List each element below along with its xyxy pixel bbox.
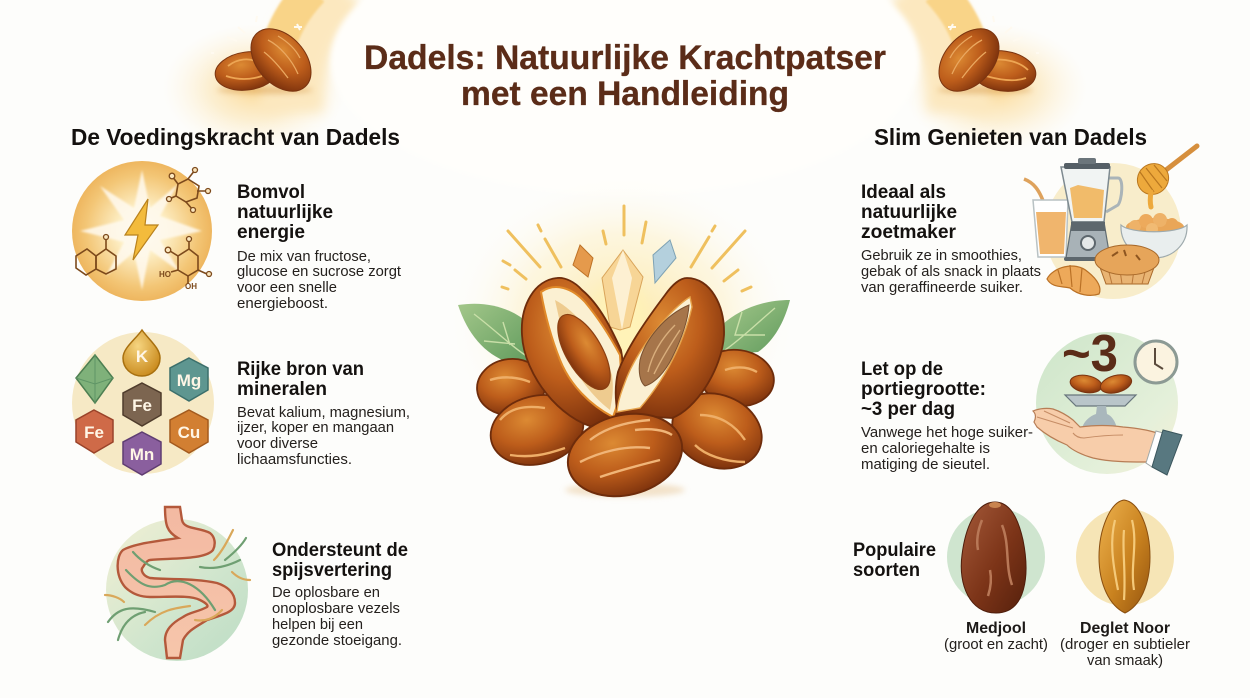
bowl with nuts	[1121, 213, 1187, 258]
variety: Deglet Noor: (droger en subtieler	[1060, 637, 1190, 653]
hand and sleeve	[1033, 408, 1182, 475]
title: met een Handleiding	[461, 75, 789, 113]
icon: mineral gems: K	[136, 347, 149, 366]
icon: energy burst with molecules: HO	[159, 270, 171, 279]
text: energy: natuurlijke	[237, 202, 333, 223]
icon: mineral gems: Mn	[130, 445, 154, 464]
rays	[502, 206, 751, 291]
title	[364, 39, 886, 113]
icon: energy burst with molecules	[72, 161, 212, 301]
text: sweetener	[861, 182, 1041, 296]
text: digestion: De oplosbare en	[272, 585, 380, 601]
text: energy: De mix van fructose,	[237, 249, 371, 265]
title: Dadels: Natuurlijke Krachtpatser	[364, 39, 886, 77]
right column: smart use	[853, 124, 1197, 669]
text: portion: ~3 per dag	[861, 399, 955, 420]
text: sweetener: van geraffineerde suiker.	[861, 280, 1023, 296]
text: energy: voor een snelle	[237, 280, 337, 296]
variety: Medjool: (groot en zacht)	[944, 637, 1048, 653]
heading: varieties	[853, 540, 936, 581]
text: digestion: Ondersteunt de	[272, 540, 408, 561]
crystals	[573, 240, 676, 380]
icon: digestive tract with fibres	[105, 507, 250, 661]
front date	[559, 402, 691, 508]
honey dipper	[1131, 146, 1197, 207]
icon: portion of three dates on a scale in a hand: ~3	[1062, 325, 1118, 383]
text: digestion	[272, 540, 408, 649]
text: portion: Vanwege het hoge suiker-	[861, 425, 1033, 441]
text: minerals: voor diverse	[237, 436, 318, 452]
text: portion: en caloriegehalte is	[861, 441, 990, 457]
top glow and golden arcs	[163, 0, 1087, 195]
text: digestion: helpen bij een	[272, 617, 363, 633]
croissant	[1047, 265, 1100, 295]
variety: Deglet Noor: van smaak)	[1087, 653, 1163, 669]
variety: Deglet Noor	[1060, 500, 1190, 669]
icon: dates top left	[211, 16, 323, 103]
icon: mineral gems	[72, 330, 214, 475]
text: portion: Let op de	[861, 359, 943, 380]
text: energy: energie	[237, 222, 305, 243]
text: energy: glucose en sucrose zorgt	[237, 264, 401, 280]
text: sweetener: Ideaal als	[861, 182, 946, 203]
pie	[1095, 245, 1159, 284]
text: sweetener: natuurlijke	[861, 202, 957, 223]
text: energy: energieboost.	[237, 296, 328, 312]
right half date with pit	[616, 278, 724, 418]
text: digestion: onoplosbare vezels	[272, 601, 400, 617]
variety: Deglet Noor: Deglet Noor	[1080, 620, 1170, 637]
scale with dates	[1065, 372, 1136, 428]
text: minerals: mineralen	[237, 379, 327, 400]
text: energy	[237, 182, 401, 312]
text: sweetener: zoetmaker	[861, 222, 957, 243]
center illustration: opened dates	[447, 175, 797, 508]
heading: varieties: soorten	[853, 560, 920, 581]
text: digestion: gezonde stoeigang.	[272, 633, 402, 649]
text: minerals: ijzer, koper en mangaan	[237, 420, 394, 436]
left column: nutrition	[71, 124, 410, 661]
text: portion: portiegrootte:	[861, 379, 986, 400]
text: portion	[861, 359, 1033, 473]
heading: right column: Slim Genieten van Dadels	[874, 124, 1147, 150]
left half date with pit	[522, 278, 623, 428]
text: energy: Bomvol	[237, 182, 305, 203]
text: sweetener: gebak of als snack in plaats	[861, 264, 1041, 280]
icon: blender, honey and baked goods	[1024, 146, 1197, 299]
icon: portion of three dates on a scale in a hand	[1033, 325, 1182, 475]
text: minerals: Bevat kalium, magnesium,	[237, 405, 410, 421]
blender	[1061, 158, 1122, 261]
clock	[1135, 341, 1177, 383]
icon: mineral gems: Fe	[84, 423, 104, 442]
text: sweetener: Gebruik ze in smoothies,	[861, 248, 1022, 264]
icon: dates top right	[927, 16, 1039, 103]
text: digestion: spijsvertering	[272, 560, 392, 581]
popular varieties	[853, 500, 1190, 669]
center glow	[447, 175, 797, 465]
icon: mineral gems: Mg	[177, 371, 201, 390]
heading: varieties: Populaire	[853, 540, 936, 561]
text: minerals	[237, 359, 410, 468]
variety: Medjool	[944, 502, 1048, 653]
text: portion: matiging de sieutel.	[861, 457, 990, 473]
leaves	[458, 300, 790, 368]
back dates	[474, 345, 778, 482]
variety: Medjool: Medjool	[966, 620, 1026, 637]
heading: left column: De Voedingskracht van Dadels	[71, 124, 400, 150]
icon: mineral gems: Fe	[132, 396, 152, 415]
text: minerals: Rijke bron van	[237, 359, 364, 380]
icon: energy burst with molecules: OH	[185, 282, 197, 291]
text: minerals: lichaamsfuncties.	[237, 452, 352, 468]
icon: mineral gems: Cu	[178, 423, 200, 442]
glass with straw	[1024, 179, 1068, 257]
